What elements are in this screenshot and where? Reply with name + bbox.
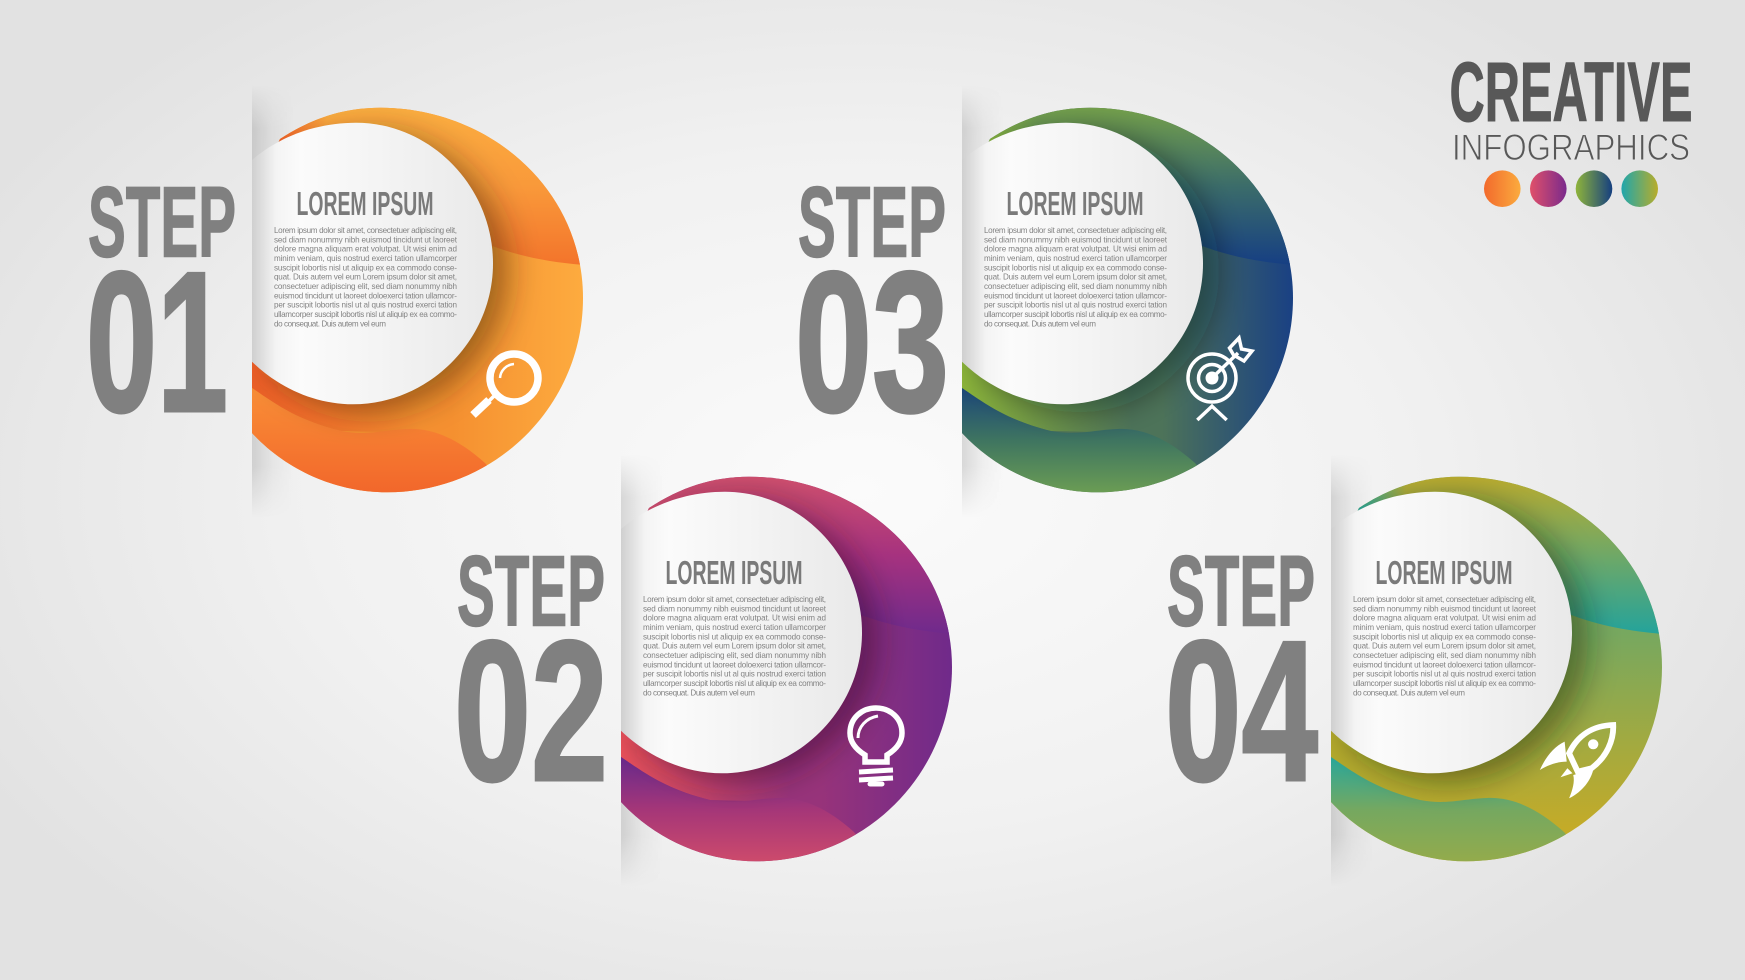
body text: per suscipit lobortis nisl ut al quis nostrud exerci tation bbox=[643, 670, 826, 679]
body text: quat. Duis autem vel eum Lorem ipsum dolor sit amet, bbox=[643, 642, 826, 651]
colour dots bbox=[1484, 170, 1658, 207]
body text: quat. Duis autem vel eum Lorem ipsum dolor sit amet, bbox=[1353, 642, 1536, 651]
logo subtitle: INFOGRAPHICS: INFOGRAPHICS bbox=[1452, 127, 1690, 168]
body text: per suscipit lobortis nisl ut al quis nostrud exerci tation bbox=[274, 301, 457, 310]
panel: step 3 bbox=[795, 85, 1307, 518]
body text: suscipit lobortis nisl ut aliquip ex ea commodo conse- bbox=[274, 263, 457, 272]
body text: quat. Duis autem vel eum Lorem ipsum dolor sit amet, bbox=[274, 273, 457, 282]
body text: euismod tincidunt ut laoreet doloexerci tation ullamcor- bbox=[1353, 660, 1536, 669]
heading: STEP: STEP bbox=[798, 166, 946, 278]
crescent ring bbox=[616, 469, 966, 869]
body text: dolore magna aliquam erat volutpat. Ut wisi enim ad bbox=[1353, 614, 1536, 623]
body text: euismod tincidunt ut laoreet doloexerci tation ullamcor- bbox=[984, 291, 1167, 300]
body text: dolore magna aliquam erat volutpat. Ut wisi enim ad bbox=[643, 614, 826, 623]
body text: sed diam nonummy nibh euismod tincidunt ut laoreet bbox=[984, 235, 1168, 244]
body text: dolore magna aliquam erat volutpat. Ut wisi enim ad bbox=[984, 245, 1167, 254]
body text bbox=[643, 595, 827, 697]
body text: consectetuer adipiscing elit, sed diam nonummy nibh bbox=[643, 651, 826, 660]
crescent ring bbox=[957, 100, 1307, 500]
white text circle bbox=[962, 123, 1203, 404]
body text: suscipit lobortis nisl ut aliquip ex ea commodo conse- bbox=[1353, 632, 1536, 641]
icon: target with arrow bbox=[1188, 338, 1252, 420]
number: 03: 03 bbox=[795, 231, 949, 454]
body text: Lorem ipsum dolor sit amet, consectetuer adipiscing elit, bbox=[643, 595, 826, 604]
body text: suscipit lobortis nisl ut aliquip ex ea commodo conse- bbox=[643, 632, 826, 641]
body text: do consequat. Duis autem vel eum bbox=[984, 319, 1096, 328]
panel: step 4 bbox=[1165, 454, 1676, 887]
fold shadow bbox=[621, 465, 646, 874]
heading: lorem ipsum: LOREM IPSUM bbox=[1376, 554, 1512, 591]
body text: quat. Duis autem vel eum Lorem ipsum dolor sit amet, bbox=[984, 273, 1167, 282]
number: 01: 01 bbox=[86, 231, 228, 454]
white text circle bbox=[621, 492, 862, 773]
body text: do consequat. Duis autem vel eum bbox=[274, 319, 386, 328]
panel: step 1 bbox=[86, 85, 597, 518]
body text: dolore magna aliquam erat volutpat. Ut wisi enim ad bbox=[274, 245, 457, 254]
body text: ullamcorper suscipit lobortis nisl ut aliquip ex ea commo- bbox=[274, 310, 457, 319]
body text: consectetuer adipiscing elit, sed diam nonummy nibh bbox=[274, 282, 457, 291]
fold shadow bbox=[962, 96, 986, 504]
body text: consectetuer adipiscing elit, sed diam nonummy nibh bbox=[1353, 651, 1536, 660]
heading: lorem ipsum: LOREM IPSUM bbox=[1006, 185, 1144, 222]
panel: step 2 bbox=[454, 454, 966, 887]
body text: do consequat. Duis autem vel eum bbox=[1353, 688, 1465, 697]
body text: Lorem ipsum dolor sit amet, consectetuer adipiscing elit, bbox=[984, 226, 1167, 235]
number: 02: 02 bbox=[454, 600, 608, 823]
fold shadow bbox=[252, 96, 276, 504]
body text: per suscipit lobortis nisl ut al quis nostrud exerci tation bbox=[1353, 670, 1536, 679]
crescent ring bbox=[247, 100, 597, 500]
body text: per suscipit lobortis nisl ut al quis nostrud exerci tation bbox=[984, 301, 1167, 310]
heading: lorem ipsum: LOREM IPSUM bbox=[296, 185, 434, 222]
body text: sed diam nonummy nibh euismod tincidunt ut laoreet bbox=[274, 235, 458, 244]
white text circle bbox=[252, 123, 493, 404]
body text: Lorem ipsum dolor sit amet, consectetuer adipiscing elit, bbox=[274, 226, 457, 235]
body text: ullamcorper suscipit lobortis nisl ut aliquip ex ea commo- bbox=[1353, 679, 1536, 688]
body text bbox=[274, 226, 458, 328]
body text: minim veniam, quis nostrud exerci tation ullamcorper bbox=[1353, 623, 1536, 632]
body text: sed diam nonummy nibh euismod tincidunt ut laoreet bbox=[643, 604, 827, 613]
logo block bbox=[1450, 45, 1692, 207]
icon: light bulb bbox=[850, 708, 902, 784]
body text: consectetuer adipiscing elit, sed diam nonummy nibh bbox=[984, 282, 1167, 291]
heading: STEP: STEP bbox=[457, 536, 605, 648]
body text: minim veniam, quis nostrud exerci tation ullamcorper bbox=[643, 623, 826, 632]
heading: STEP: STEP bbox=[1167, 536, 1315, 648]
white text circle bbox=[1331, 492, 1572, 773]
body text: minim veniam, quis nostrud exerci tation ullamcorper bbox=[274, 254, 457, 263]
body text: Lorem ipsum dolor sit amet, consectetuer adipiscing elit, bbox=[1353, 595, 1536, 604]
body text: suscipit lobortis nisl ut aliquip ex ea commodo conse- bbox=[984, 263, 1167, 272]
body text: do consequat. Duis autem vel eum bbox=[643, 688, 755, 697]
body text bbox=[984, 226, 1168, 328]
body text: minim veniam, quis nostrud exerci tation ullamcorper bbox=[984, 254, 1167, 263]
icon: rocket bbox=[1540, 725, 1613, 798]
body text bbox=[1353, 595, 1537, 697]
heading: lorem ipsum: LOREM IPSUM bbox=[666, 554, 802, 591]
crescent ring bbox=[1326, 469, 1676, 869]
heading: STEP: STEP bbox=[88, 166, 236, 278]
fold shadow bbox=[1331, 465, 1356, 874]
body text: ullamcorper suscipit lobortis nisl ut aliquip ex ea commo- bbox=[984, 310, 1167, 319]
number: 04: 04 bbox=[1165, 600, 1318, 823]
body text: euismod tincidunt ut laoreet doloexerci tation ullamcor- bbox=[274, 291, 457, 300]
body text: euismod tincidunt ut laoreet doloexerci tation ullamcor- bbox=[643, 660, 826, 669]
icon: magnifying glass bbox=[473, 354, 538, 415]
body text: sed diam nonummy nibh euismod tincidunt ut laoreet bbox=[1353, 604, 1537, 613]
body text: ullamcorper suscipit lobortis nisl ut aliquip ex ea commo- bbox=[643, 679, 826, 688]
